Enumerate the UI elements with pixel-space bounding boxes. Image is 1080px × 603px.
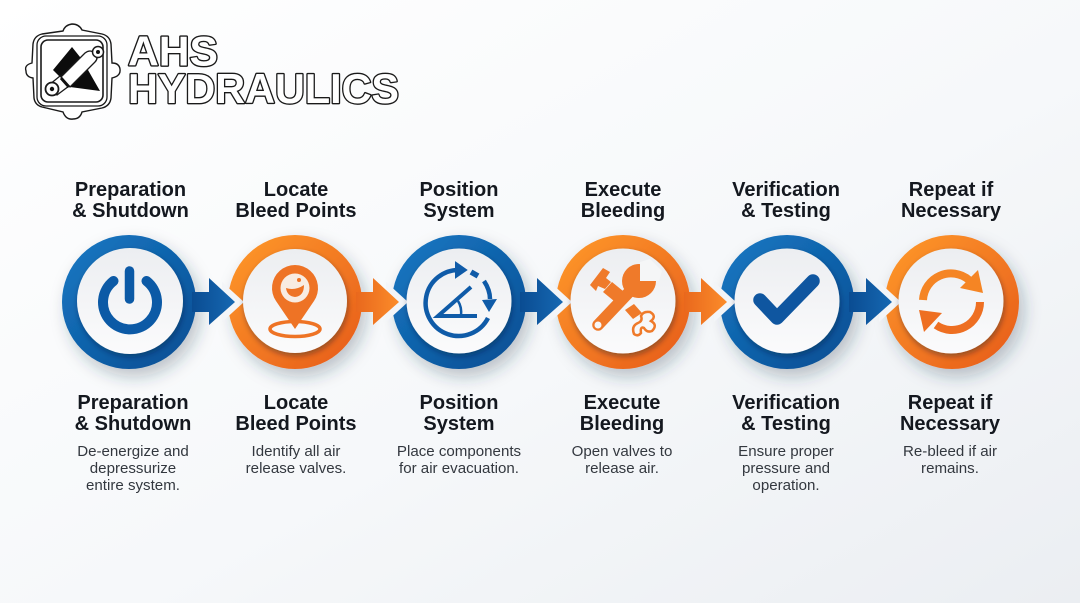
step 5 top heading: Verification (732, 179, 840, 201)
step 4 bottom heading: Execute (584, 392, 660, 414)
step 5 ring (720, 235, 854, 369)
notch: step 3 (386, 282, 408, 322)
step 4 description: release air. (585, 460, 659, 477)
step 2 bottom heading: Locate (264, 392, 328, 414)
step 2 top heading: Locate (264, 179, 328, 201)
icon: location pin with fluid (270, 265, 320, 336)
step 1 bottom heading: & Shutdown (75, 413, 191, 435)
arrow: step 2 to 3 (356, 278, 399, 325)
step 2 caption (235, 392, 357, 477)
step 5 bottom heading: Verification (732, 392, 840, 414)
step 6 top heading: Repeat if (909, 179, 994, 201)
step 5 description: pressure and (742, 460, 830, 477)
icon: check mark (760, 281, 813, 318)
step 1 caption (75, 392, 191, 494)
step 4 caption (572, 392, 672, 477)
logo emblem (26, 24, 120, 119)
step 1 top heading: & Shutdown (72, 200, 189, 222)
step 4 bottom heading: Bleeding (580, 413, 664, 435)
icon: refresh arrows (919, 270, 983, 332)
step 6 caption (900, 392, 1001, 477)
step 1 top heading: Preparation (75, 179, 186, 201)
step 1 description: depressurize (90, 460, 176, 477)
notch: step 5 (714, 282, 736, 322)
step 2 top heading: Bleed Points (235, 200, 357, 222)
step 2 description: Identify all air (252, 443, 340, 460)
step 1 description: entire system. (86, 477, 180, 494)
step 3 inner disc (406, 248, 512, 354)
arrow: step 5 to 6 (849, 278, 892, 325)
step 2 description: release valves. (246, 460, 346, 477)
notch: step 6 (879, 282, 901, 322)
step 4 description: Open valves to (572, 443, 672, 460)
logo wordmark (128, 28, 399, 112)
step 6 description: Re-bleed if air (903, 443, 997, 460)
step 6 bottom heading: Necessary (900, 413, 1001, 435)
arrow: step 3 to 4 (520, 278, 563, 325)
icon: wrench and screwdriver with air (590, 259, 662, 335)
step 4 inner disc (570, 248, 676, 354)
step 5 bottom heading: & Testing (741, 413, 831, 435)
icon: power (103, 271, 157, 329)
step 4 top heading: Bleeding (581, 200, 665, 222)
step 5 description: Ensure proper (738, 443, 834, 460)
step 5 caption (732, 392, 840, 494)
step 6 top heading: Necessary (901, 200, 1002, 222)
step 4 ring (556, 235, 690, 369)
logo wordmark: HYDRAULICS (128, 65, 399, 112)
step 3 description: Place components (397, 443, 521, 460)
logo: AHS Hydraulics (26, 24, 399, 119)
notch: step 4 (550, 282, 572, 322)
step 2 inner disc (243, 249, 347, 353)
step 5 inner disc (734, 248, 840, 354)
step 2 ring (228, 235, 362, 369)
step 4 top heading: Execute (585, 179, 661, 201)
step 6 ring (885, 235, 1019, 369)
step 3 top heading: Position (420, 179, 498, 201)
logo wordmark: AHS (128, 28, 218, 74)
arrow: step 4 to 5 (684, 278, 727, 325)
arrow: step 1 to 2 (192, 278, 235, 325)
step 3 caption (397, 392, 521, 477)
step 1 description: De-energize and (77, 443, 189, 460)
step 1 inner disc (77, 248, 183, 354)
step 1 ring (62, 235, 196, 369)
icon: rotation and angle (426, 263, 497, 336)
step 3 description: for air evacuation. (399, 460, 519, 477)
notch: step 2 (222, 282, 244, 322)
step 5 description: operation. (752, 477, 820, 494)
step 5 top heading: & Testing (741, 200, 831, 222)
step 6 description: remains. (921, 460, 979, 477)
step 6 inner disc (898, 248, 1004, 354)
step 2 bottom heading: Bleed Points (235, 413, 357, 435)
step 3 bottom heading: Position (420, 392, 498, 414)
step 3 top heading: System (423, 200, 495, 222)
step 3 ring (392, 235, 526, 369)
step 1 bottom heading: Preparation (77, 392, 189, 414)
step 3 bottom heading: System (423, 413, 495, 435)
step 6 bottom heading: Repeat if (908, 392, 993, 414)
